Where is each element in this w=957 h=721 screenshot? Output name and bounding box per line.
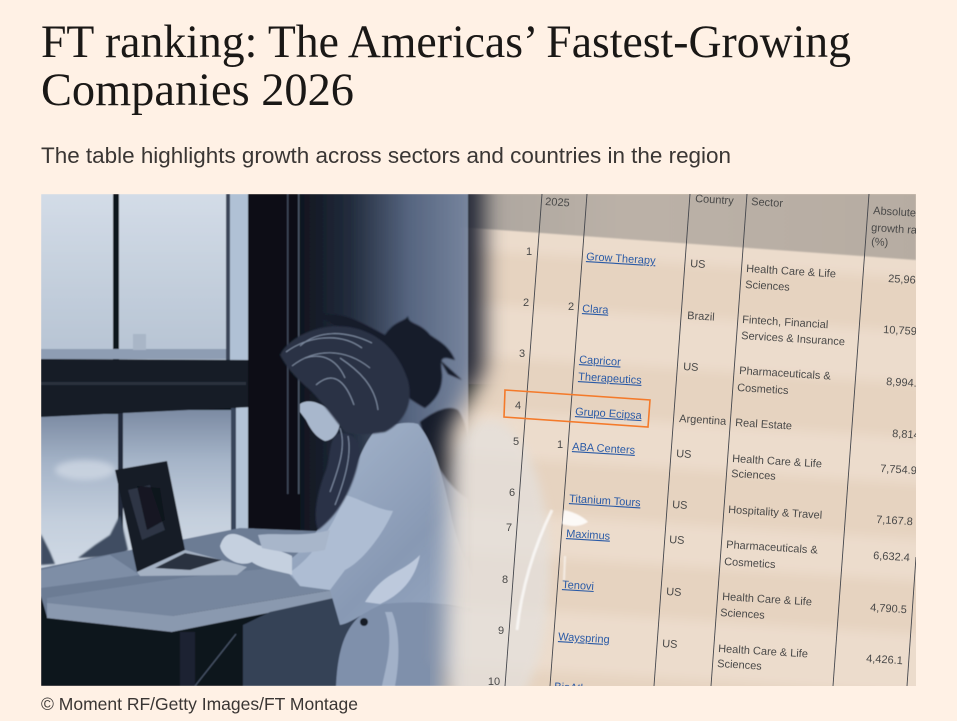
countries: US [690, 258, 706, 271]
table header: Sector [751, 196, 784, 210]
table [41, 528, 350, 686]
dark column at right of wall [468, 194, 490, 384]
growth rates: 8,814.1 [892, 428, 929, 442]
sectors: Health Care & Life [732, 453, 822, 470]
company names: Titanium Tours [569, 493, 641, 509]
photo of ranking table [430, 194, 916, 686]
sectors: Sciences [720, 607, 766, 622]
growth rates: 6,632.4 [873, 550, 910, 564]
table header: 2025 [545, 196, 570, 209]
laptop [115, 461, 247, 576]
rank numbers: 1 [526, 246, 532, 258]
countries: US [672, 499, 688, 512]
sectors: Health Care & Life [718, 643, 808, 660]
shrubs [41, 515, 128, 565]
rank numbers: 5 [513, 436, 519, 448]
rank numbers: 4 [515, 400, 521, 412]
subtitle: The table highlights growth across sectors and countries in the region [41, 143, 731, 168]
rank numbers: 3 [519, 348, 525, 360]
rank numbers: 8 [502, 574, 508, 586]
glare reflection [517, 510, 588, 630]
sectors: Cosmetics [724, 556, 776, 571]
countries: US [666, 586, 682, 599]
jacket [290, 422, 456, 626]
title: Companies 2026 [41, 64, 354, 116]
table text [488, 193, 931, 695]
sectors: Health Care & Life [746, 263, 836, 280]
table header: Absolute [873, 205, 916, 220]
sectors: Sciences [731, 468, 777, 483]
countries: US [676, 448, 692, 461]
title [41, 16, 851, 116]
growth rates: 10,759.2 [883, 324, 926, 339]
rank numbers: 7 [506, 522, 512, 534]
rank numbers [488, 246, 574, 688]
company names: Tenovi [562, 579, 594, 593]
table header: growth rate [871, 222, 926, 237]
rank numbers: 1 [557, 439, 563, 451]
growth rates [866, 274, 916, 664]
wall [300, 194, 468, 634]
image credit: © Moment RF/Getty Images/FT Montage [41, 694, 358, 714]
photo montage [41, 194, 916, 686]
orange highlight box [504, 390, 650, 427]
upper window panes [41, 194, 248, 360]
sectors: Hospitality & Travel [728, 504, 823, 522]
title: FT ranking: The Americas’ Fastest-Growing [41, 16, 851, 68]
hair [280, 326, 410, 434]
company names: Clara [582, 303, 610, 317]
countries [662, 258, 727, 651]
legs and chair [242, 598, 356, 686]
table header: (%) [871, 236, 889, 249]
countries: Brazil [687, 310, 715, 324]
photo: woman working on a laptop by a window [41, 194, 528, 686]
sectors: Cosmetics [737, 382, 789, 397]
sectors: Pharmaceuticals & [726, 539, 819, 557]
countries: US [683, 361, 699, 374]
table header: Country [695, 193, 734, 207]
growth rates: 8,994.3 [886, 376, 923, 390]
countries: US [662, 638, 678, 651]
company names: BioAtla [554, 681, 590, 695]
company names: Capricor [579, 354, 621, 369]
lower window panes [41, 407, 251, 579]
woman [220, 326, 463, 686]
table header [545, 193, 926, 249]
growth rates: 4,790.5 [870, 602, 907, 616]
rank numbers: 2 [523, 297, 529, 309]
company names: Maximus [566, 528, 611, 543]
rank numbers: 2 [568, 301, 574, 313]
table background and rows [430, 194, 916, 686]
rank numbers: 10 [488, 676, 500, 688]
sectors: Fintech, Financial [742, 314, 829, 331]
sectors: Real Estate [735, 417, 792, 432]
company names: Grow Therapy [586, 251, 656, 267]
face [300, 401, 340, 441]
growth rates: 7,754.9 [880, 463, 917, 477]
sectors: Health Care & Life [722, 591, 812, 608]
company names: Grupo Ecipsa [575, 406, 643, 422]
sectors [717, 263, 845, 673]
growth rates: 25,964.5 [888, 273, 931, 288]
company names: Wayspring [558, 631, 610, 646]
table column rules [505, 194, 916, 686]
sectors: Sciences [745, 279, 791, 294]
arm and hands [220, 534, 292, 575]
sectors: Pharmaceuticals & [739, 365, 832, 383]
rank numbers: 9 [498, 625, 504, 637]
window beam and frame [41, 194, 300, 539]
company names: Therapeutics [578, 371, 643, 387]
hair tail [316, 433, 360, 530]
growth rates: 4,426.1 [866, 653, 903, 667]
rank numbers: 6 [509, 487, 515, 499]
growth rates: 7,167.8 [876, 514, 913, 528]
sectors: Sciences [717, 658, 763, 673]
sectors: Services & Insurance [741, 330, 845, 348]
company names: ABA Centers [572, 441, 636, 457]
plant [334, 314, 466, 494]
company names [554, 251, 656, 695]
countries: US [669, 534, 685, 547]
countries: Argentina [679, 413, 727, 428]
